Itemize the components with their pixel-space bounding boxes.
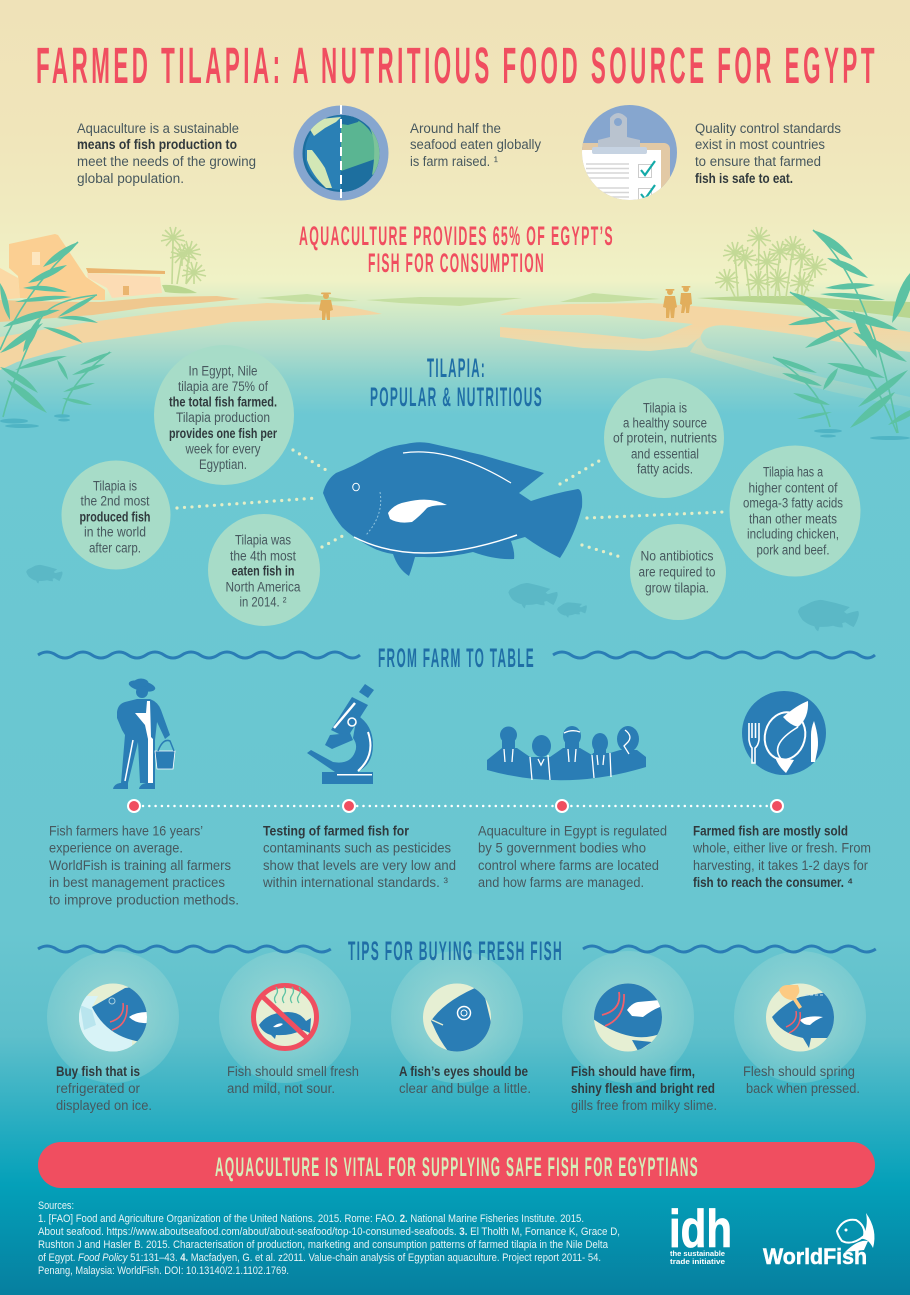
logo: idh: trade initiative [670, 1257, 725, 1266]
text: testing of farmed fish: show that levels are very low and [263, 858, 456, 873]
bubble: nile tilapia 75%: tilapia are 75% of [178, 379, 268, 394]
infographic canvas: POPULAR & NUTRITIOUS [370, 382, 543, 412]
bubble: second most produced [62, 460, 170, 570]
background fish silhouettes [26, 565, 859, 631]
bubble: no antibiotics: are required to [638, 564, 716, 580]
tip text: smell: Fish should smell fresh [227, 1064, 359, 1079]
bubble: second most produced: Tilapia is [93, 478, 137, 494]
bubble: fourth most eaten: eaten fish in [232, 564, 294, 578]
bubble: healthy source of protein: of protein, nutrients [613, 430, 717, 446]
tip text: flesh and gills: Fish should have firm, [571, 1064, 695, 1079]
figures: two people on right bank [663, 286, 692, 318]
bubble: no antibiotics: No antibiotics [640, 548, 714, 564]
tip text: eyes: clear and bulge a little. [399, 1081, 531, 1096]
tip text: eyes: A fish’s eyes should be [399, 1064, 528, 1079]
icon: fish flesh and gills [594, 984, 662, 1052]
text: aquaculture regulation [478, 824, 667, 890]
sources [38, 1200, 620, 1277]
dotted connectors from fish to bubbles [177, 450, 723, 558]
tip text: spring back: Flesh should spring [743, 1064, 855, 1079]
bubble: healthy source of protein: a healthy source [623, 416, 707, 430]
icon: fish on ice [79, 984, 147, 1052]
bubble: omega-3 content: pork and beef. [756, 542, 830, 558]
bubble: healthy source of protein [604, 378, 724, 498]
heading: tips for buying fresh fish with waves [38, 936, 876, 966]
text: aquaculture is sustainable: Aquaculture is a sustainable [77, 121, 239, 136]
text: quality control standards: exist in most countries [695, 137, 825, 152]
tip text: buy fish refrigerated [56, 1064, 152, 1113]
text: aquaculture is sustainable: global population. [77, 171, 184, 186]
tip text: smell [227, 1064, 359, 1096]
text: how farmed fish are sold: Farmed fish are mostly sold [693, 824, 848, 838]
bubble: omega-3 content: including chicken, [747, 526, 839, 542]
bubble: second most produced: produced fish [80, 510, 150, 524]
bubble: nile tilapia 75%: Tilapia production [176, 410, 270, 425]
sources: 1. [FAO] Food and Agriculture Organization of the United Nations. 2015. Rome: FAO. 2. National Marine Fisheries Institute. 2015. [38, 1213, 584, 1225]
text: aquaculture is sustainable: meet the needs of the growing [77, 154, 256, 169]
logo: worldfish [763, 1213, 874, 1269]
water ripples: left reeds [0, 414, 70, 428]
tip text: spring back: back when pressed. [746, 1081, 860, 1096]
text: how farmed fish are sold: harvesting, it takes 1-2 days for [693, 858, 868, 873]
heading: from farm to table with waves [38, 643, 875, 673]
bubble: no antibiotics [630, 524, 726, 620]
reeds: left [0, 242, 112, 417]
landscape: left shore with buildings [0, 227, 382, 370]
text: quality control standards: Quality control standards [695, 121, 841, 136]
heading: aquaculture provides 65% [299, 221, 614, 278]
sources: Rushton J and Hasler B. 2015. Characterisation of production, marketing and consumption patterns of farmed tilapia in the Nile Delta [38, 1239, 609, 1251]
bubble: fourth most eaten: North America [226, 580, 301, 594]
tip text: flesh and gills: shiny flesh and bright red [571, 1081, 715, 1096]
text: testing of farmed fish: contaminants such as pesticides [263, 840, 451, 856]
text: testing of farmed fish: within international standards. ³ [262, 875, 448, 890]
icon: clipboard checklist [582, 105, 677, 200]
icon: fish flesh pressed by finger [766, 984, 834, 1052]
text: how farmed fish are sold: whole, either live or fresh. From [692, 840, 871, 856]
tip text: buy fish refrigerated: displayed on ice. [56, 1098, 152, 1113]
text: fish farmers experience: in best management practices [49, 875, 225, 890]
text: fish farmers experience: to improve production methods. [49, 892, 239, 908]
text: half of seafood is farm raised: seafood eaten globally [410, 137, 541, 152]
icon: fish eye [423, 984, 491, 1052]
bubble: omega-3 content: Tilapia has a [763, 464, 823, 480]
icon: no bad smell prohibition sign [254, 986, 316, 1048]
bubble: nile tilapia 75%: In Egypt, Nile [188, 364, 258, 378]
sources: Penang, Malaysia: WorldFish. DOI: 10.13140/2.1.1102.1769. [38, 1265, 289, 1277]
logo: idh: the sustainable [670, 1249, 725, 1258]
bubble: nile tilapia 75%: provides one fish per [169, 426, 278, 441]
icon: fish farmer with bucket [113, 678, 175, 789]
bubble: omega-3 content: than other meats [749, 512, 837, 526]
bubble: omega-3 content: higher content of [748, 480, 838, 496]
bubble: nile tilapia 75%: Egyptian. [199, 457, 247, 472]
bubble: healthy source of protein: and essential [631, 446, 699, 462]
text: aquaculture regulation: and how farms are managed. [478, 875, 644, 890]
icon: fish on plate with fork and knife [742, 691, 826, 775]
text: quality control standards [695, 121, 841, 186]
reeds: right [773, 230, 910, 433]
landscape: right shore and channels [257, 227, 910, 408]
text: aquaculture is sustainable [77, 121, 256, 186]
bubble: fourth most eaten: in 2014. ² [240, 594, 287, 610]
text: fish farmers experience: Fish farmers have 16 years’ [49, 824, 203, 838]
bubble: no antibiotics: grow tilapia. [645, 580, 709, 596]
tip halos [47, 951, 866, 1083]
sources: of Egypt. Food Policy 51:131–43. 4. Macfadyen, G. et al. z2011. Value-chain analysis of Egyptian aquaculture. Project report 2011- 54. [38, 1252, 601, 1264]
text: quality control standards: to ensure that farmed [695, 154, 821, 169]
logo: idh: idh [669, 1200, 732, 1259]
timeline with red markers [128, 800, 783, 812]
text: half of seafood is farm raised [410, 121, 541, 169]
bubble: fourth most eaten [208, 514, 320, 626]
water ripples: right reeds [814, 429, 910, 440]
bubble: fourth most eaten: Tilapia was [235, 532, 291, 548]
icon: government officials group [487, 726, 646, 780]
tip text: buy fish refrigerated: refrigerated or [56, 1081, 140, 1096]
bubble: healthy source of protein: Tilapia is [643, 400, 687, 416]
tip text: flesh and gills [571, 1064, 717, 1113]
bubble: nile tilapia 75%: week for every [185, 442, 261, 456]
tip text: eyes [399, 1064, 531, 1096]
sources: About seafood. https://www.aboutseafood.com/about/about-seafood/top-10-consumed-seafoods. 3. El Tholth M, Fornance K, Grace D, [38, 1226, 620, 1238]
text: aquaculture regulation: by 5 government bodies who [478, 840, 646, 856]
text: half of seafood is farm raised: Around half the [410, 121, 501, 136]
icon: globe [294, 105, 388, 200]
bubble: fourth most eaten: the 4th most [230, 548, 296, 564]
text: aquaculture regulation: Aquaculture in Egypt is regulated [478, 824, 667, 838]
bubble: nile tilapia 75%: the total fish farmed. [169, 394, 277, 410]
tip text: smell: and mild, not sour. [227, 1081, 335, 1096]
tip text: flesh and gills: gills free from milky slime. [571, 1098, 717, 1113]
text: aquaculture regulation: control where farms are located [478, 858, 659, 873]
sources: Sources: [38, 1200, 74, 1212]
text: fish farmers experience [49, 824, 239, 908]
text: how farmed fish are sold: fish to reach the consumer. ⁴ [693, 875, 853, 890]
figure: person on left bank [319, 292, 333, 320]
text: fish farmers experience: experience on average. [49, 840, 183, 856]
bubble: omega-3 content [730, 446, 860, 576]
heading: aquaculture provides 65%: FISH FOR CONSUMPTION [368, 248, 545, 278]
text: testing of farmed fish: Testing of farmed fish for [263, 824, 410, 838]
bubble: nile tilapia 75% [154, 345, 294, 485]
heading: tilapia popular and nutritious: TILAPIA: [427, 353, 486, 383]
bubble: omega-3 content: omega-3 fatty acids [743, 496, 843, 510]
bubble: second most produced: in the world [84, 524, 146, 540]
text: fish farmers experience: WorldFish is training all farmers [49, 858, 231, 873]
bubble: second most produced: after carp. [89, 540, 141, 556]
text: how farmed fish are sold [692, 824, 871, 890]
text: testing of farmed fish [262, 824, 456, 890]
heading: tips for buying fresh fish with waves: TIPS FOR BUYING FRESH FISH [348, 936, 563, 966]
main fish illustration [323, 442, 582, 576]
text: aquaculture is sustainable: means of fish production to [77, 137, 237, 152]
logo: worldfish: WorldFish [763, 1244, 867, 1269]
tip text: buy fish refrigerated: Buy fish that is [56, 1064, 140, 1079]
heading: tilapia popular and nutritious [370, 353, 543, 412]
tip text: spring back [743, 1064, 860, 1096]
text: half of seafood is farm raised: is farm raised. ¹ [410, 154, 498, 169]
heading: from farm to table with waves: FROM FARM TO TABLE [378, 643, 535, 673]
icon: pressing finger [779, 985, 802, 1009]
icon: microscope [307, 684, 374, 784]
bubble: healthy source of protein: fatty acids. [637, 462, 693, 476]
bubble: second most produced: the 2nd most [80, 494, 150, 508]
text: quality control standards: fish is safe to eat. [695, 171, 793, 186]
banner: aquaculture is vital [38, 1142, 875, 1188]
